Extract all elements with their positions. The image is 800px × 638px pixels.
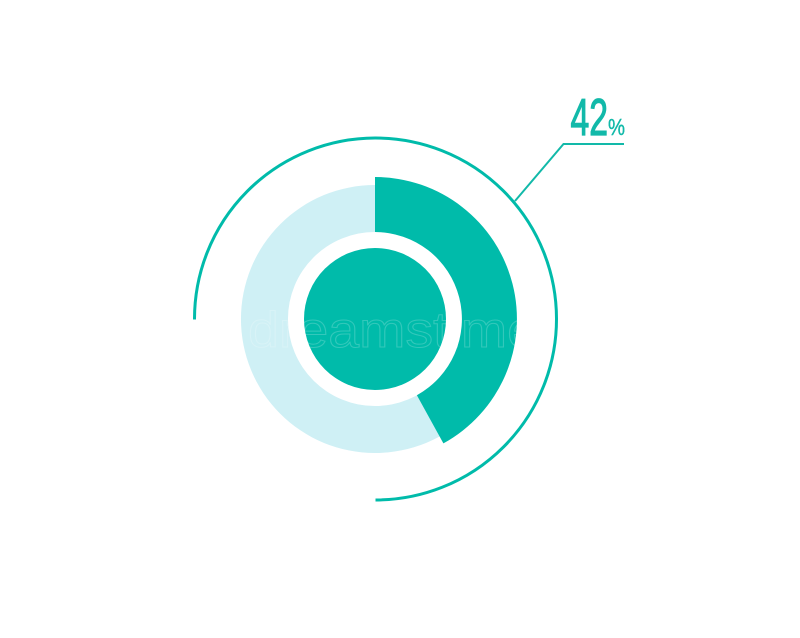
42 percent highlighted segment [375,177,517,443]
center circle [304,248,446,390]
light background donut ring [241,185,509,453]
percentage label: 42 [570,89,608,147]
percentage label: % [608,114,625,140]
watermark: dreamstime [248,302,538,358]
leader line to label [515,144,624,201]
outer thin arc [194,138,556,500]
